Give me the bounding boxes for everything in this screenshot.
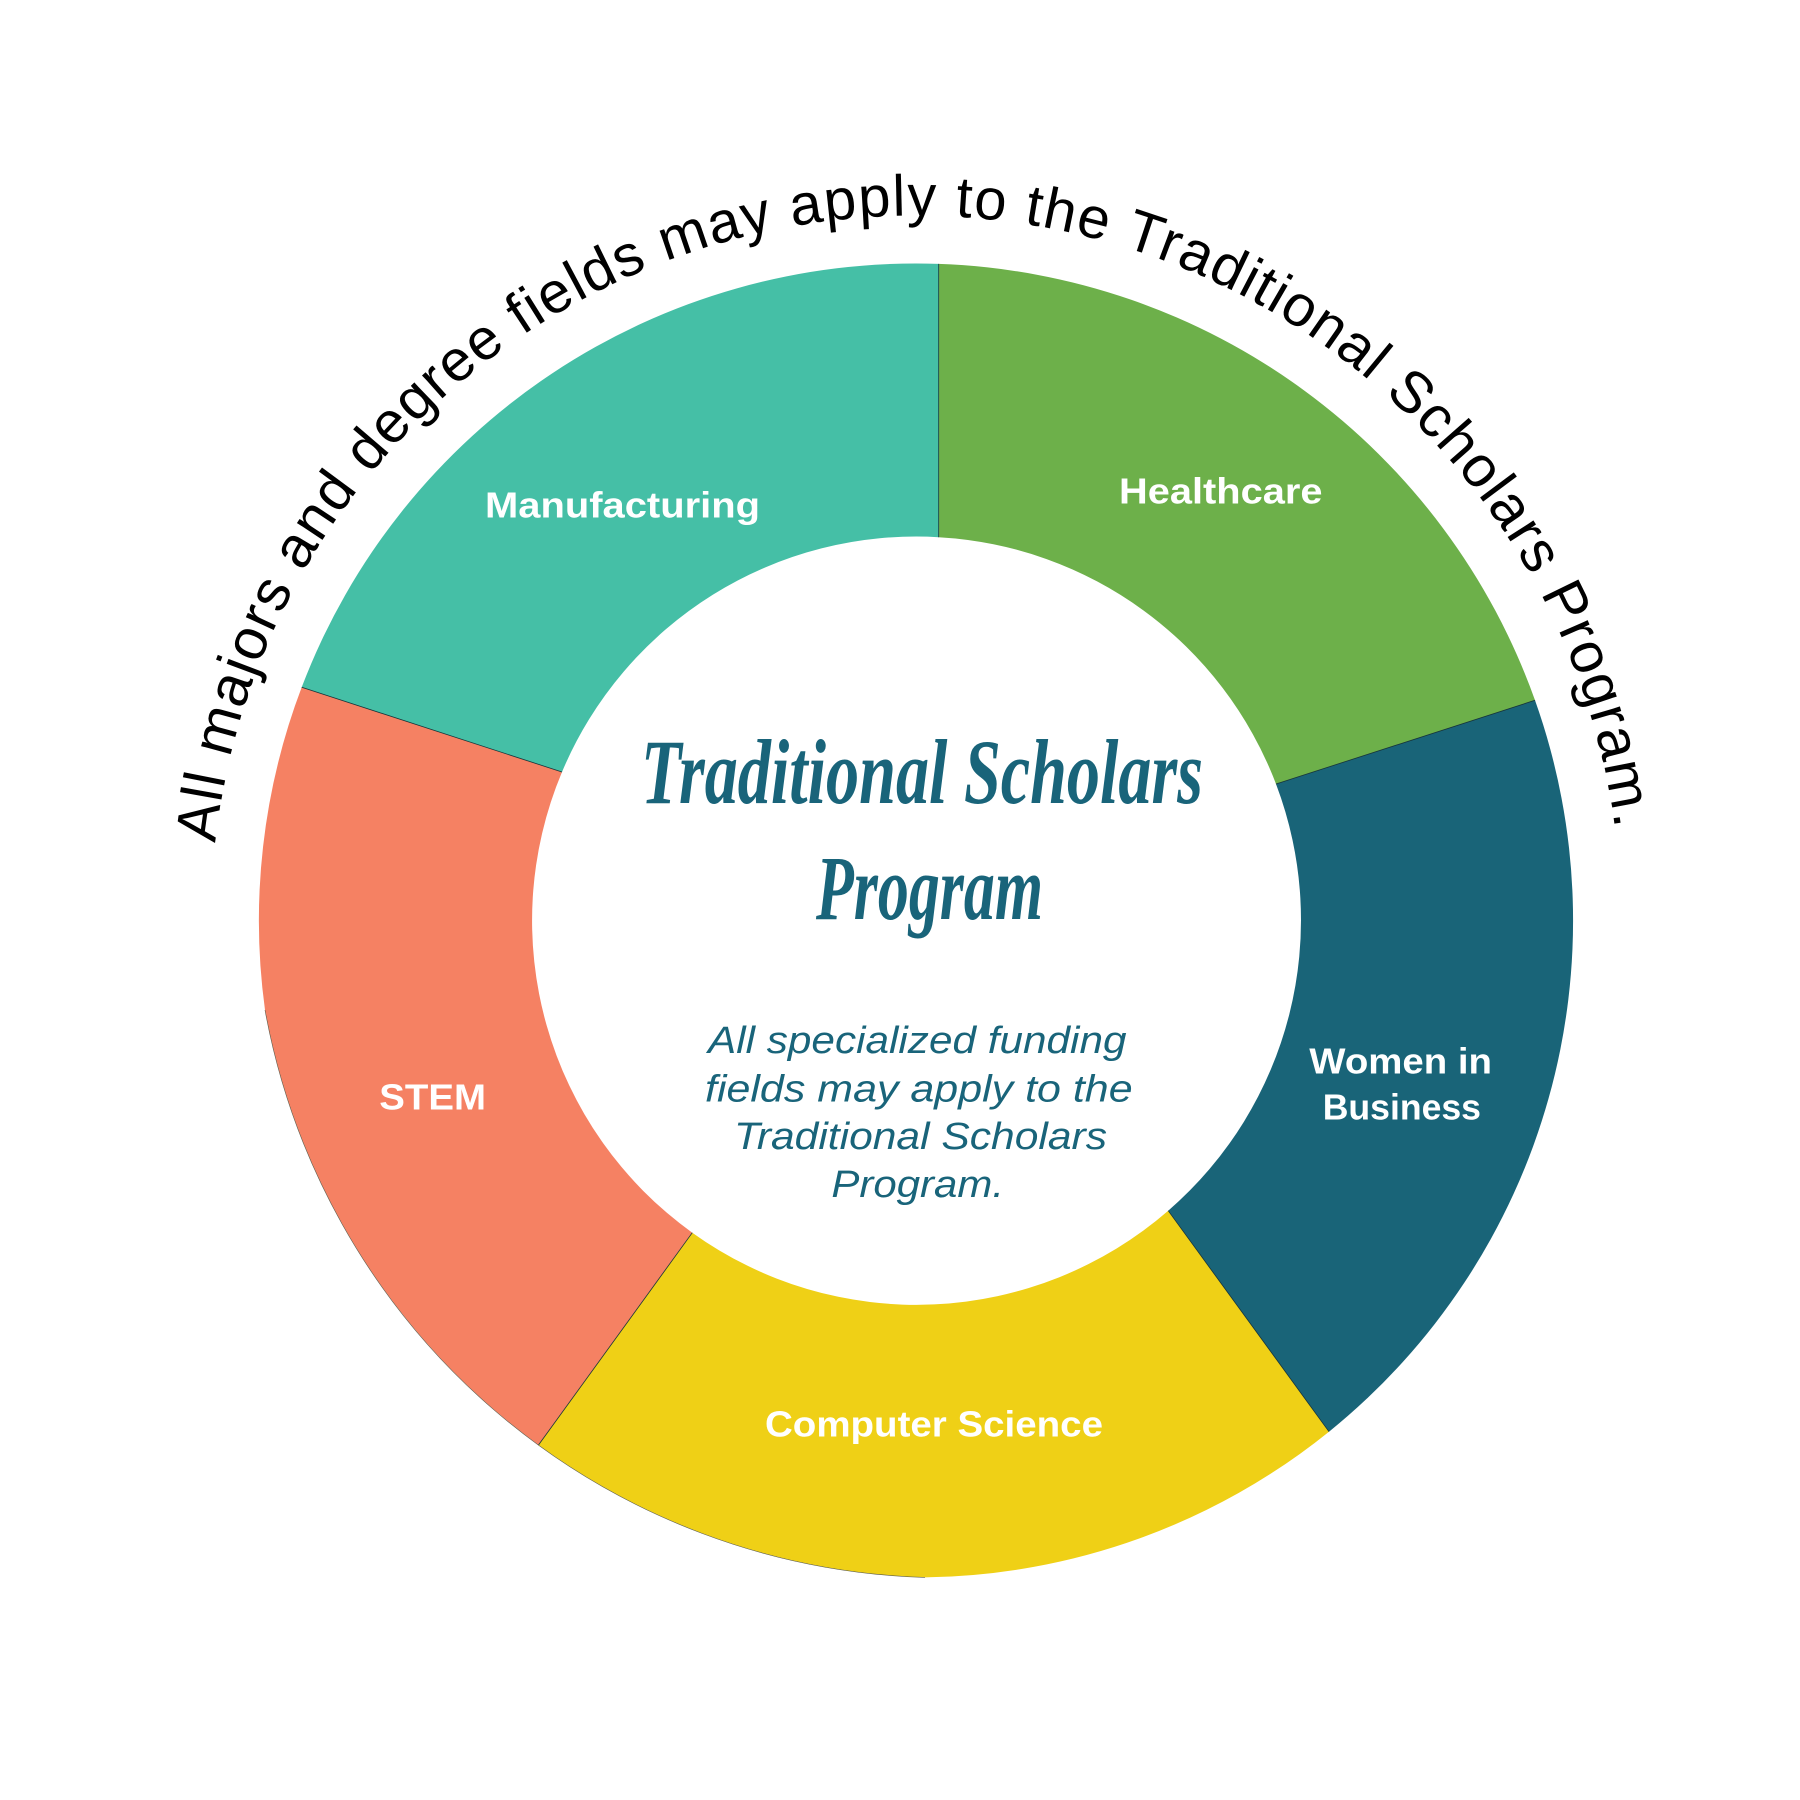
slice: Healthcare (939, 264, 1535, 784)
slice: STEM (259, 687, 692, 1445)
label: Manufacturing: Manufacturing (485, 484, 760, 526)
center description: Traditional Scholars (734, 1116, 1107, 1158)
label: Computer Science: Computer Science (765, 1404, 1103, 1445)
slice: Women in Business (1168, 700, 1573, 1432)
center description: All specialized funding (706, 1020, 1126, 1062)
label: Women in Business: Women in (1309, 1040, 1492, 1081)
label: Women in Business: Business (1323, 1086, 1481, 1127)
donut chart (259, 264, 1573, 1577)
curved heading: All majors and degree fields may apply to the Traditional Scholars Program. (178, 174, 1642, 843)
slice: Manufacturing (302, 264, 939, 772)
slice: Computer Science (538, 1211, 1329, 1577)
label: Women in Business (1309, 1040, 1492, 1127)
label: Healthcare: Healthcare (1119, 470, 1322, 511)
center title: Program (815, 837, 1043, 939)
center description: fields may apply to the (705, 1068, 1133, 1110)
center description: Program. (831, 1164, 1004, 1206)
center title (641, 721, 1203, 939)
center title: Traditional Scholars (641, 721, 1203, 823)
label: STEM: STEM (379, 1076, 486, 1117)
center description (705, 1020, 1133, 1206)
